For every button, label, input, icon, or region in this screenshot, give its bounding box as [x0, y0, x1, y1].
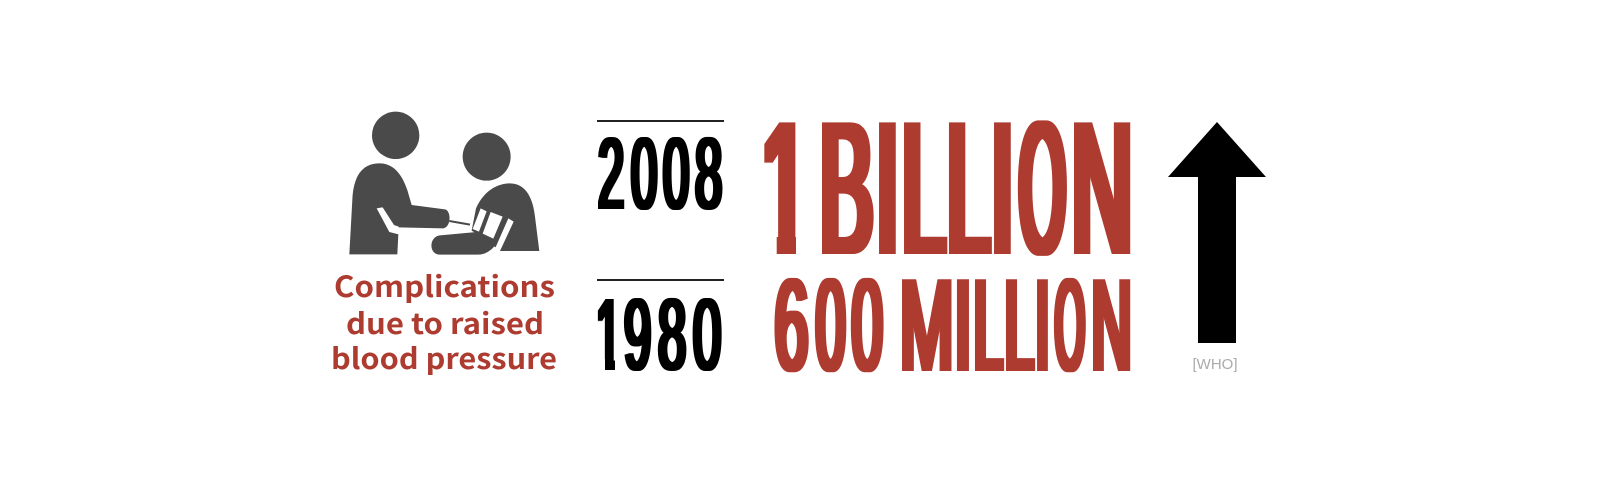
figure: 600 million: 0 — [852, 254, 883, 398]
figure: 600 million: I — [1036, 254, 1049, 398]
figure: 600 million: I — [955, 254, 971, 398]
source label: [WHO] — [1192, 356, 1238, 373]
year row: 1980: 9 — [624, 279, 651, 391]
year row: 2008 — [597, 118, 724, 230]
figure: 600 million: L — [1005, 254, 1034, 398]
caption: complications due to raised blood pressure: blood pressure — [331, 336, 557, 378]
year row: 1980 — [592, 279, 724, 391]
year row: 2008: 2 — [598, 118, 624, 230]
caption: complications due to raised blood pressure: due to raised — [346, 301, 544, 343]
figure: 1 billion: B — [820, 84, 873, 292]
figure: 600 million: 0 — [816, 254, 845, 398]
figure: 1 billion — [755, 84, 1132, 292]
year row: 1980: 1 — [596, 279, 621, 391]
year row: 2008: 8 — [695, 118, 722, 230]
caption: complications due to raised blood pressure — [331, 264, 557, 378]
year row: 2008: 0 — [663, 118, 689, 230]
figure: 600 million: O — [1055, 254, 1085, 398]
figure: 600 million: L — [974, 254, 1003, 398]
year row: 1980: 8 — [658, 279, 686, 391]
year row: 1980: 0 — [693, 279, 721, 391]
figure: 1 billion: I — [991, 84, 1014, 292]
text: N — [1072, 84, 1132, 292]
figure: 1 billion: L — [902, 84, 945, 292]
figure: 600 million: M — [900, 254, 954, 398]
figure: 1 billion: O — [1020, 84, 1065, 292]
text: N — [1092, 254, 1132, 398]
figure: 1 billion: I — [876, 84, 898, 292]
caption: complications due to raised blood pressure: Complications — [334, 264, 555, 306]
figure: 600 million: 6 — [775, 254, 808, 398]
arrow: upward increase — [1168, 122, 1266, 343]
icon: clinician measuring a patient's blood pressure — [349, 112, 539, 255]
year row: 2008: 0 — [631, 118, 657, 230]
figure: 1 billion: 1 — [760, 84, 810, 292]
figure: 1 billion: L — [947, 84, 990, 292]
